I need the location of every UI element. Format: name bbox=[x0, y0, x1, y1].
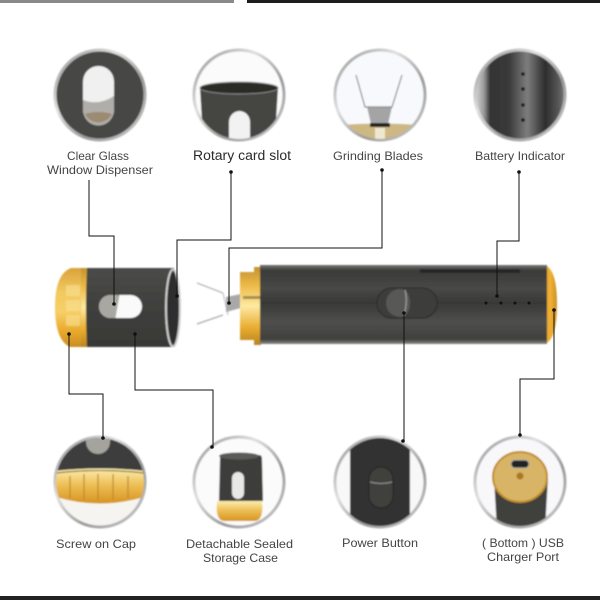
label: usb charger port: Charger Port bbox=[487, 550, 560, 564]
label: storage case: Storage Case bbox=[203, 551, 278, 565]
battery indicator dots bbox=[484, 302, 530, 304]
leader line: storage case bbox=[133, 332, 214, 449]
label: storage case: Detachable Sealed bbox=[186, 537, 293, 551]
label: clear glass: Clear Glass bbox=[67, 149, 129, 163]
label: usb charger port bbox=[482, 536, 564, 564]
detail: usb charger port bbox=[475, 437, 565, 530]
label: rotary card slot: Rotary card slot bbox=[193, 148, 291, 163]
leader line: grinding blades bbox=[227, 168, 384, 305]
leader line: rotary card slot bbox=[175, 170, 233, 298]
detail: storage case bbox=[194, 437, 284, 527]
leader line: screw on cap bbox=[67, 332, 105, 440]
product: storage case with gold cap bbox=[55, 268, 180, 347]
label: clear glass: Window Dispenser bbox=[47, 163, 153, 177]
label: grinding blades: Grinding Blades bbox=[333, 149, 423, 163]
label: battery indicator: Battery Indicator bbox=[475, 149, 565, 163]
leader line: battery indicator bbox=[495, 170, 521, 298]
product: main body bbox=[240, 265, 557, 345]
label: usb charger port: ( Bottom ) USB bbox=[482, 536, 564, 550]
top edge bar bbox=[0, 0, 600, 3]
power button slider bbox=[377, 288, 437, 318]
detail: battery indicator bbox=[475, 50, 565, 140]
label: power button: Power Button bbox=[342, 536, 418, 550]
detail: rotary card slot bbox=[194, 50, 284, 140]
bottom edge bar bbox=[0, 596, 600, 600]
label: storage case bbox=[186, 537, 293, 565]
detail: power button bbox=[335, 436, 425, 528]
leader line: usb charger port bbox=[518, 308, 556, 437]
product: grinding blades bbox=[197, 283, 241, 324]
leader line: clear glass window bbox=[89, 180, 116, 306]
detail: screw on cap bbox=[54, 436, 146, 527]
leader line: power button bbox=[401, 311, 406, 443]
detail: clear glass window bbox=[55, 50, 145, 140]
label: clear glass bbox=[47, 149, 153, 177]
detail: grinding blades bbox=[335, 50, 425, 142]
label: screw on cap: Screw on Cap bbox=[56, 537, 136, 551]
